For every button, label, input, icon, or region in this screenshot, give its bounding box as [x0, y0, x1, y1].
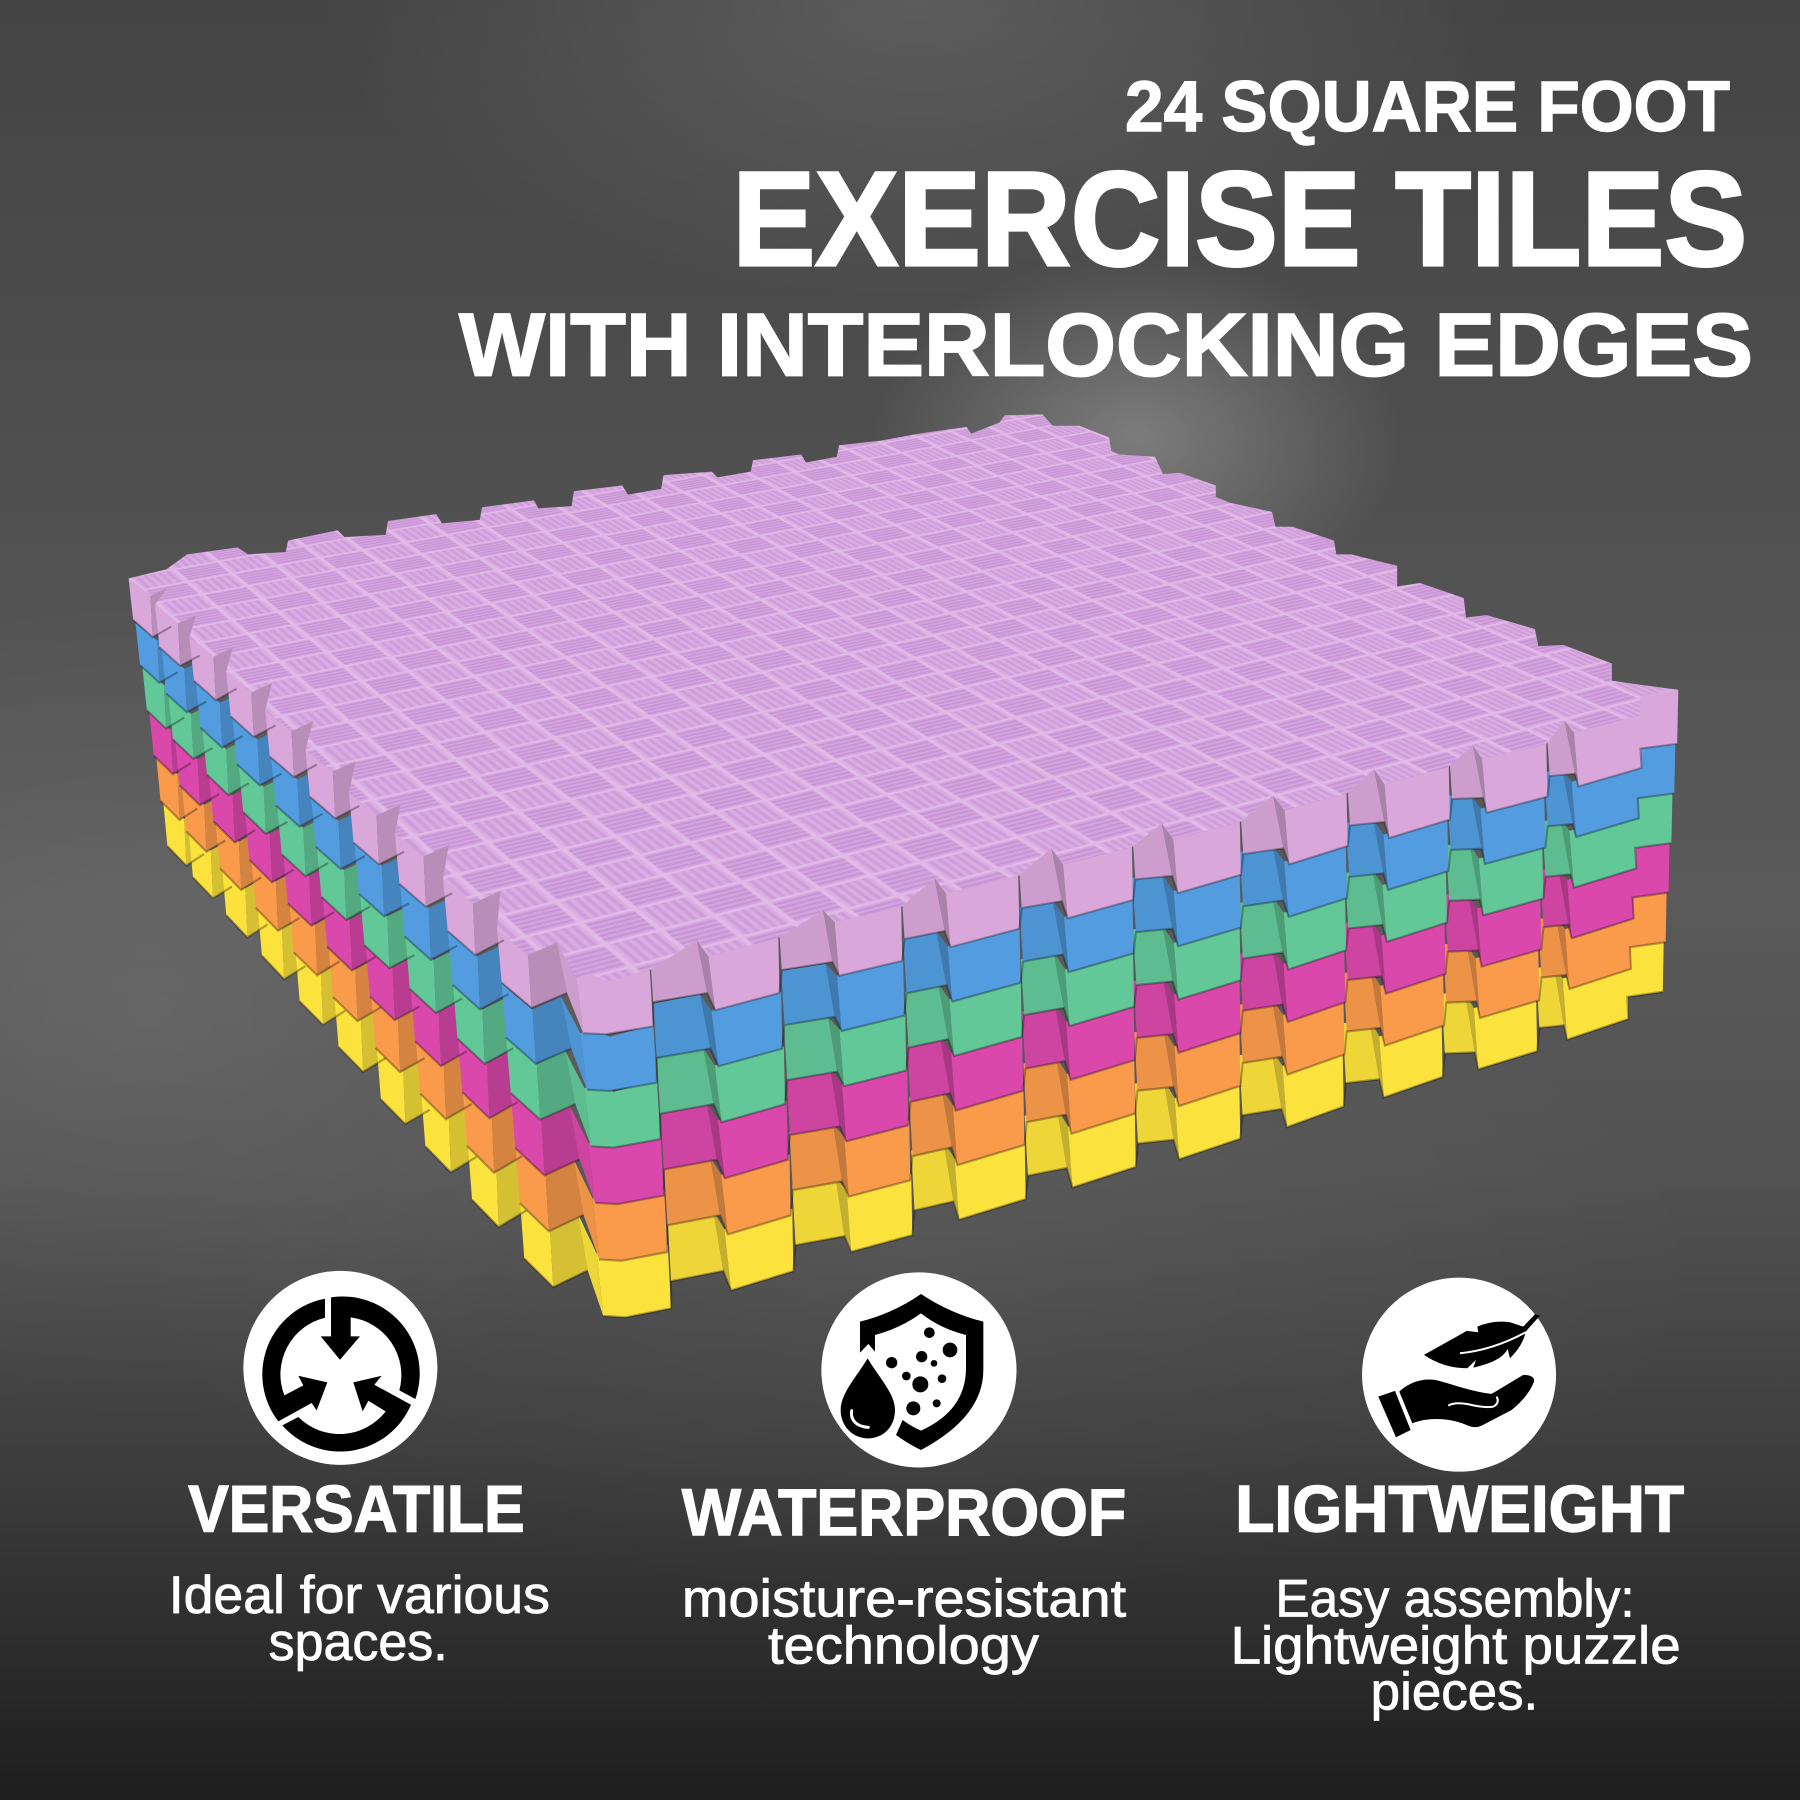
description: waterproof: [682, 1569, 1126, 1675]
description: lightweight: Lightweight puzzle: [1231, 1616, 1681, 1675]
feature: waterproof: [682, 1272, 1126, 1675]
title block: [459, 68, 1753, 394]
description: versatile: Ideal for various: [169, 1566, 550, 1625]
product photo: stack of six foam tiles: [128, 414, 1678, 1318]
description: versatile: [169, 1566, 550, 1672]
description: waterproof: moisture-resistant: [682, 1569, 1126, 1628]
icon: recycling arrows: [243, 1271, 437, 1465]
title line: with interlocking edges: WITH INTERLOCKING EDGES: [459, 294, 1753, 394]
title line: 24 square foot: 24 SQUARE FOOT: [1125, 68, 1730, 147]
description: versatile: spaces.: [269, 1613, 448, 1672]
orange layer: [156, 755, 1667, 1264]
feature: lightweight: [1231, 1278, 1684, 1721]
blue layer: [135, 623, 1675, 1092]
green layer: [142, 667, 1673, 1149]
top surface with basket-weave texture: [128, 414, 1678, 982]
icon: hand and feather: [1362, 1278, 1556, 1472]
feature: versatile: [169, 1271, 550, 1672]
title line: exercise tiles: EXERCISE TILES: [732, 144, 1747, 294]
description: lightweight: Easy assembly:: [1275, 1569, 1635, 1628]
heading: versatile: VERSATILE: [188, 1472, 525, 1545]
yellow layer: [163, 799, 1664, 1321]
purple layer: [129, 579, 1678, 1034]
magenta layer: [149, 711, 1670, 1206]
description: lightweight: [1231, 1569, 1681, 1721]
icon: shield with water drop: [821, 1272, 1017, 1468]
description: waterproof: technology: [768, 1616, 1040, 1675]
heading: waterproof: WATERPROOF: [682, 1476, 1126, 1549]
description: lightweight: pieces.: [1371, 1662, 1538, 1721]
heading: lightweight: LIGHTWEIGHT: [1235, 1472, 1684, 1545]
